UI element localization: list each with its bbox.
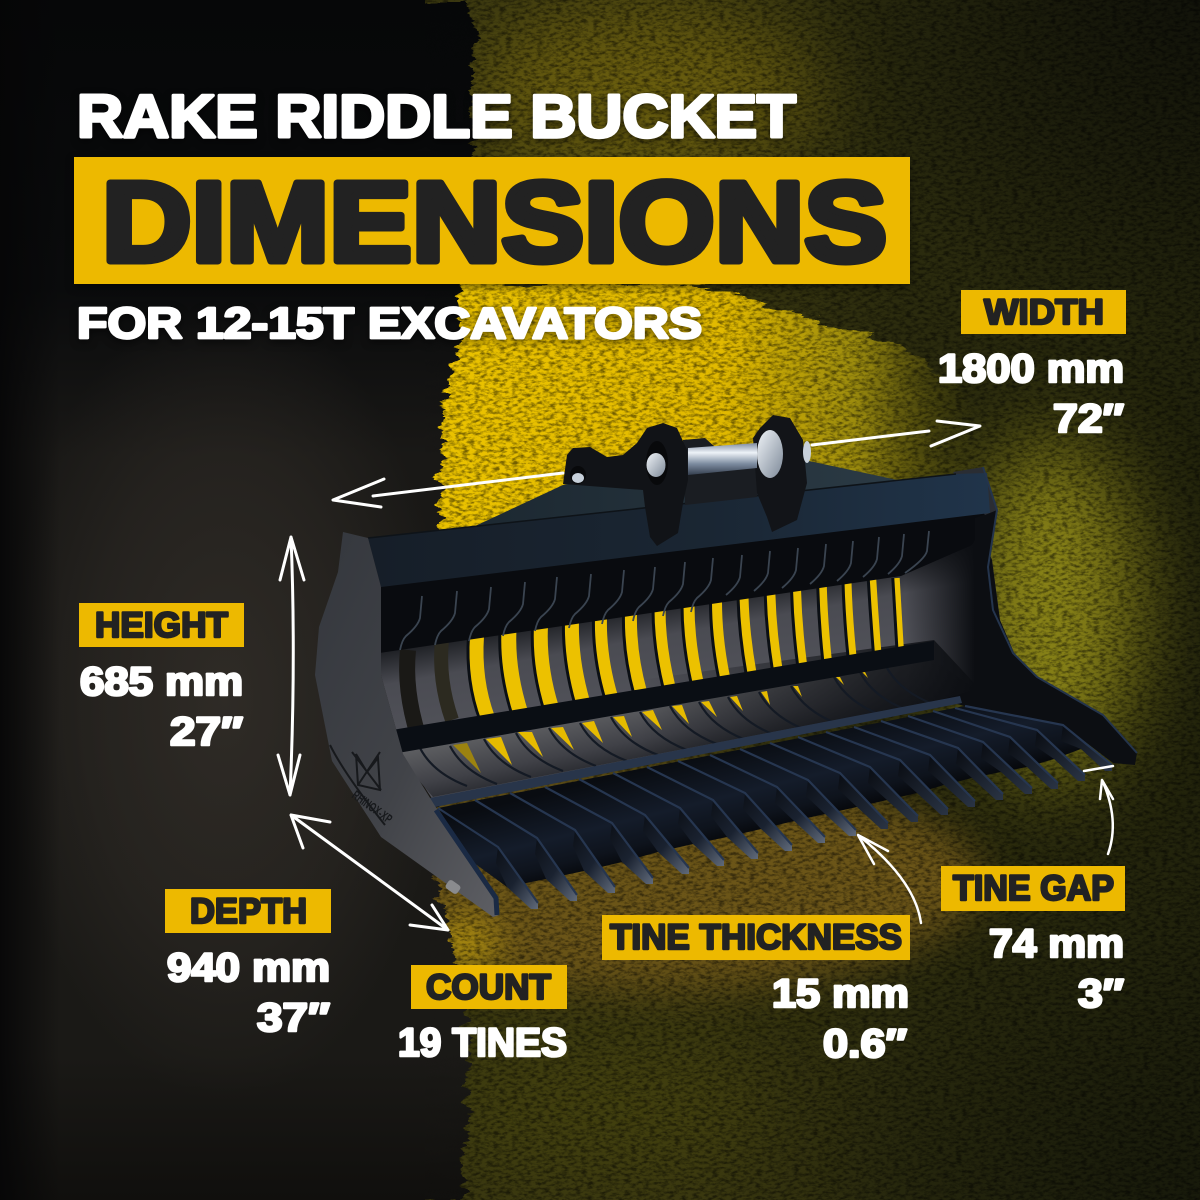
- lug web and rear boss: [683, 438, 760, 505]
- rake web: [438, 706, 1081, 887]
- callout: tine gap: [941, 866, 1125, 1016]
- right side plate: [940, 510, 1137, 765]
- floor beam: [430, 696, 962, 808]
- tine top edges: [438, 706, 1112, 903]
- callout: tine gap: 74 mm: [989, 922, 1124, 966]
- front lug: [563, 423, 688, 546]
- callout: count: COUNT: [426, 968, 551, 1007]
- grid slots: upper row: [407, 578, 901, 735]
- pivot pin: [570, 430, 811, 485]
- interior shading: [640, 518, 1030, 760]
- callout: depth: [165, 889, 331, 1040]
- callout: tine thickness: 0.6″: [823, 1022, 907, 1066]
- right plate edge: [983, 467, 1137, 753]
- callout: count: 19 TINES: [398, 1021, 567, 1065]
- tine blades: right group: [838, 725, 1112, 829]
- callout: depth: DEPTH: [190, 892, 307, 931]
- title line: rake riddle bucket: RAKE RIDDLE BUCKET: [77, 83, 796, 150]
- callout: tine thickness: [602, 915, 910, 1066]
- callout: tine thickness: 15 mm: [772, 972, 909, 1016]
- arrow: height: [278, 537, 304, 795]
- rear lug: [753, 415, 807, 532]
- right plate top tab: [953, 467, 997, 515]
- dark band below beam: [379, 512, 990, 653]
- callout: count: [398, 965, 567, 1065]
- callout: width: 1800 mm: [938, 347, 1124, 391]
- centre cross bar: [392, 641, 934, 754]
- callout: depth: 940 mm: [167, 946, 330, 990]
- tine tops in dark band: [400, 531, 929, 650]
- beam top edge: [368, 474, 956, 538]
- top beam: [368, 473, 990, 587]
- lower rib edges: [420, 666, 933, 786]
- left plate blue edge: [436, 810, 497, 915]
- width arrow rear shaft: [333, 421, 980, 507]
- logo: Rhinox-XP: RHINOX-XP: [349, 787, 395, 827]
- arrow: depth: [291, 815, 448, 930]
- callout: height: [79, 603, 244, 754]
- callout: tine gap: TINE GAP: [953, 869, 1114, 908]
- product image: rake riddle bucket: [315, 415, 1137, 917]
- callout: height: HEIGHT: [95, 606, 228, 645]
- top gusset plate: [473, 461, 902, 560]
- callout: height: 27″: [170, 710, 243, 754]
- grid slots: lower row: [453, 672, 868, 773]
- arrow: tine gap: [1084, 766, 1113, 854]
- headline banner: dimensions: DIMENSIONS: [102, 159, 887, 285]
- logo: Rhinox-XP: [330, 745, 395, 827]
- interior panel: [379, 515, 1030, 800]
- side plate bolt: [444, 879, 462, 895]
- subtitle: FOR 12-15T EXCAVATORS: [77, 299, 702, 348]
- callout: height: 685 mm: [80, 660, 243, 704]
- lower interior ribs: [392, 660, 990, 797]
- arrow: tine thickness: [858, 835, 921, 923]
- callout: width: [938, 290, 1126, 441]
- callout: tine gap: 3″: [1078, 972, 1124, 1016]
- callout: width: 72″: [1053, 397, 1124, 441]
- callout: width: WIDTH: [984, 293, 1104, 332]
- left side plate: [315, 532, 499, 917]
- callout: tine thickness: TINE THICKNESS: [610, 918, 902, 957]
- tine blades: [496, 780, 856, 909]
- callout: depth: 37″: [257, 996, 330, 1040]
